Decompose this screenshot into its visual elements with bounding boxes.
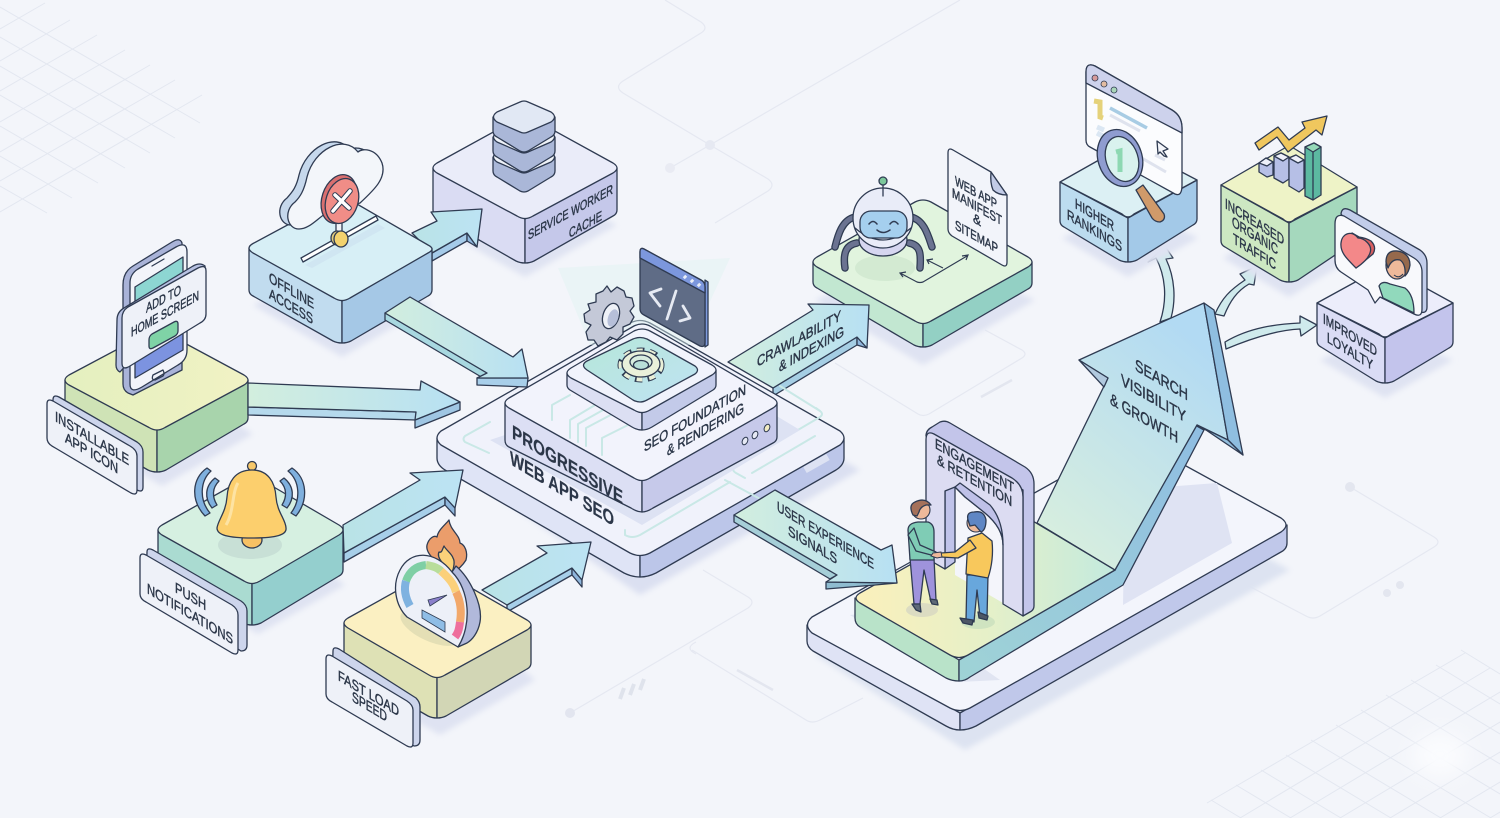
shadow of arrow on plate	[1123, 483, 1232, 605]
label: higher rankings: HIGHER	[1075, 196, 1114, 235]
base right face	[640, 438, 844, 577]
panel: service worker cache	[433, 101, 617, 277]
label: search visibility and growth: & GROWTH	[1110, 389, 1178, 447]
block right face	[923, 262, 1032, 347]
label: increased organic traffic: INCREASED	[1225, 196, 1284, 249]
block left face	[1221, 185, 1289, 282]
label: add to home screen	[131, 283, 199, 341]
block top face	[1317, 267, 1453, 337]
block left face	[249, 248, 342, 343]
icon: direction arrows	[900, 255, 968, 282]
background circuit outlines	[565, 0, 1438, 722]
label plate: push notifications	[140, 549, 247, 654]
label: SEO foundation and rendering	[644, 382, 746, 460]
label: offline access: ACCESS	[269, 286, 313, 328]
label plate: push notifications: NOTIFICATIONS	[147, 581, 233, 648]
block top face	[158, 477, 343, 584]
arrow: crawlability and indexing: & INDEXING	[779, 324, 844, 376]
block right face	[342, 249, 432, 343]
label: SEO foundation and rendering: SEO FOUNDATION	[644, 382, 746, 456]
arrow: fast load speed to PWA	[482, 542, 591, 612]
arrow: offline access to PWA	[385, 297, 528, 387]
label: higher rankings	[1067, 196, 1122, 256]
arrow: crawlability and indexing	[728, 304, 869, 396]
person: right	[931, 512, 992, 625]
panel: SEO foundation block	[490, 248, 800, 525]
icon: 3D gear	[584, 286, 634, 346]
label: SEO foundation and rendering: & RENDERING	[667, 400, 744, 460]
panel: push notifications	[140, 462, 345, 654]
label plate: installable app icon: APP ICON	[65, 430, 118, 477]
label: offline access	[269, 270, 314, 328]
block top face	[813, 200, 1032, 324]
title: progressive web app SEO: PROGRESSIVE	[512, 421, 623, 509]
panel: growth platform	[734, 246, 1317, 750]
panel: improved loyalty	[1317, 209, 1453, 398]
beam of light	[558, 258, 730, 345]
engagement and retention gate: & RETENTION	[937, 452, 1012, 510]
icon: ranking browser with magnifier	[1086, 65, 1182, 222]
block left face	[344, 623, 437, 718]
background grid: top left	[0, 3, 202, 213]
panel: manifest document: SITEMAP	[955, 218, 998, 257]
block left face	[1317, 303, 1385, 383]
panel: manifest document: &	[973, 211, 981, 230]
icon: speedometer with flame	[396, 520, 480, 653]
block top face	[1060, 145, 1197, 217]
label plate: fast load speed: FAST LOAD	[338, 668, 399, 720]
label plate: fast load speed	[326, 648, 420, 747]
icon: cloud with offline symbol	[280, 142, 385, 268]
circuit traces	[464, 386, 822, 537]
block left face	[158, 530, 252, 625]
label: increased organic traffic	[1225, 196, 1284, 274]
label: increased organic traffic: TRAFFIC	[1233, 231, 1276, 274]
arrow: offline access to service worker cache	[412, 209, 482, 261]
block right face	[252, 530, 343, 625]
people shaking hands	[906, 500, 995, 629]
arrow: user experience signals: USER EXPERIENCE	[777, 499, 874, 573]
icon: bar chart with rising arrow	[1255, 116, 1327, 200]
panel: increased organic traffic	[1221, 116, 1358, 297]
plate top face	[808, 440, 1286, 710]
icon: bell with sound waves	[195, 462, 305, 559]
label: improved loyalty: IMPROVED	[1323, 311, 1377, 360]
panel: installable app icon	[47, 240, 253, 494]
arrow: user experience signals	[734, 490, 897, 589]
label plate: push notifications: PUSH	[175, 580, 206, 614]
block left face	[433, 168, 525, 263]
growth floor	[855, 425, 1204, 681]
block top face	[344, 571, 531, 678]
label plate: installable app icon	[47, 396, 143, 494]
plate left face	[807, 625, 960, 730]
label plate: fast load speed: SPEED	[352, 689, 387, 726]
panel: crawler robot and manifest	[813, 149, 1035, 365]
label: service worker cache	[528, 182, 613, 244]
block left face	[65, 380, 157, 472]
growth arrow	[1037, 303, 1243, 570]
icon: code window	[640, 248, 708, 347]
background grid: bottom right	[1207, 650, 1500, 818]
arrow: user experience signals: SIGNALS	[788, 523, 837, 568]
label: service worker cache: SERVICE WORKER	[528, 182, 613, 244]
arrow: installable app icon to PWA	[248, 381, 460, 428]
panel: PWA base platform	[437, 248, 860, 595]
panel: manifest document	[948, 149, 1007, 266]
label: higher rankings: RANKINGS	[1067, 207, 1122, 256]
panel: offline access	[249, 142, 432, 357]
label: add to home screen: HOME SCREEN	[131, 288, 199, 341]
panel: manifest document: MANIFEST	[952, 186, 1002, 229]
engagement and retention gate	[926, 421, 1034, 616]
label: improved loyalty	[1323, 311, 1377, 374]
circuit traces on block	[552, 395, 630, 455]
label: add to home screen: ADD TO	[146, 283, 181, 317]
label: search visibility and growth	[1110, 355, 1188, 447]
label: offline access: OFFLINE	[269, 270, 314, 313]
person: left	[908, 500, 938, 612]
block left face	[813, 262, 923, 347]
block top face	[433, 117, 617, 218]
label: increased organic traffic: ORGANIC	[1232, 214, 1278, 259]
panel: manifest document: WEB APP	[955, 174, 997, 213]
block right face	[1128, 180, 1197, 262]
block right face	[1289, 187, 1357, 282]
panel: fast load speed	[326, 520, 535, 747]
icon: flat gear	[622, 351, 660, 378]
label: service worker cache: CACHE	[569, 209, 602, 242]
icon: database stack	[493, 101, 555, 192]
label: improved loyalty: LOYALTY	[1327, 330, 1373, 374]
arrow: push notifications to PWA	[343, 470, 463, 562]
icon: phone with add to home screen card	[116, 240, 206, 395]
curved arrows to outcomes	[1148, 246, 1317, 349]
block top face	[1221, 147, 1357, 222]
label: search visibility and growth: SEARCH	[1135, 355, 1188, 404]
block right face	[525, 168, 617, 263]
base left face	[437, 438, 640, 577]
block right face	[157, 380, 248, 472]
icon: speech bubble with heart and person	[1335, 209, 1427, 315]
status lights	[741, 423, 771, 446]
panel: higher rankings	[1060, 65, 1198, 277]
icon: spider robot	[835, 177, 932, 281]
label: search visibility and growth: VISIBILITY	[1121, 370, 1186, 426]
block right face	[437, 625, 531, 718]
arrow: crawlability and indexing: CRAWLABILITY	[757, 308, 841, 371]
block right face	[642, 403, 777, 512]
block top face	[505, 324, 777, 480]
plate right face	[960, 525, 1287, 730]
block left face	[1060, 182, 1128, 262]
block right face	[1385, 303, 1453, 383]
top tile	[567, 329, 716, 430]
title: progressive web app SEO: WEB APP SEO	[510, 447, 614, 531]
block top face	[249, 198, 432, 300]
base top face	[437, 320, 844, 556]
block top face	[65, 330, 248, 430]
label plate: installable app icon: INSTALLABLE	[55, 409, 129, 469]
block left face	[505, 403, 642, 512]
engagement and retention gate: ENGAGEMENT	[935, 436, 1014, 497]
